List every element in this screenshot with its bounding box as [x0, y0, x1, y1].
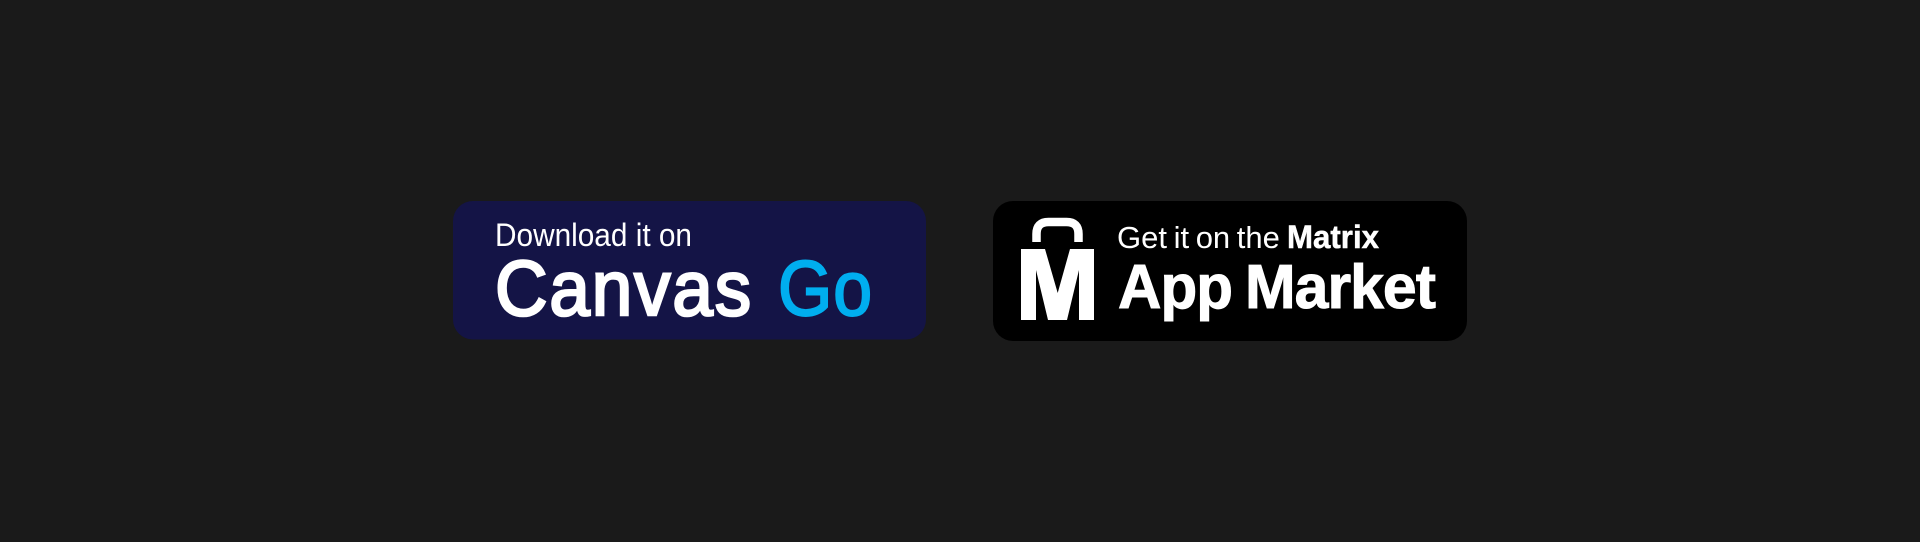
text: Download it on: Download it on: [495, 217, 692, 253]
badge: Canvas Go: [453, 201, 926, 340]
badge: Matrix App Market: [993, 201, 1467, 341]
icon: Matrix shopping bag M: [1021, 222, 1094, 320]
letter M: [1021, 249, 1094, 320]
text: Matrix: Matrix: [1287, 219, 1379, 255]
text: App: App: [1118, 253, 1232, 322]
badge background black: [993, 201, 1467, 341]
text: Market: Market: [1245, 253, 1435, 322]
badge background navy: [453, 201, 926, 340]
text: Go: Go: [778, 244, 873, 332]
text: Canvas: Canvas: [495, 244, 753, 332]
text: Get it on the: Get it on the: [1117, 220, 1280, 255]
bag handle: [1036, 222, 1078, 242]
